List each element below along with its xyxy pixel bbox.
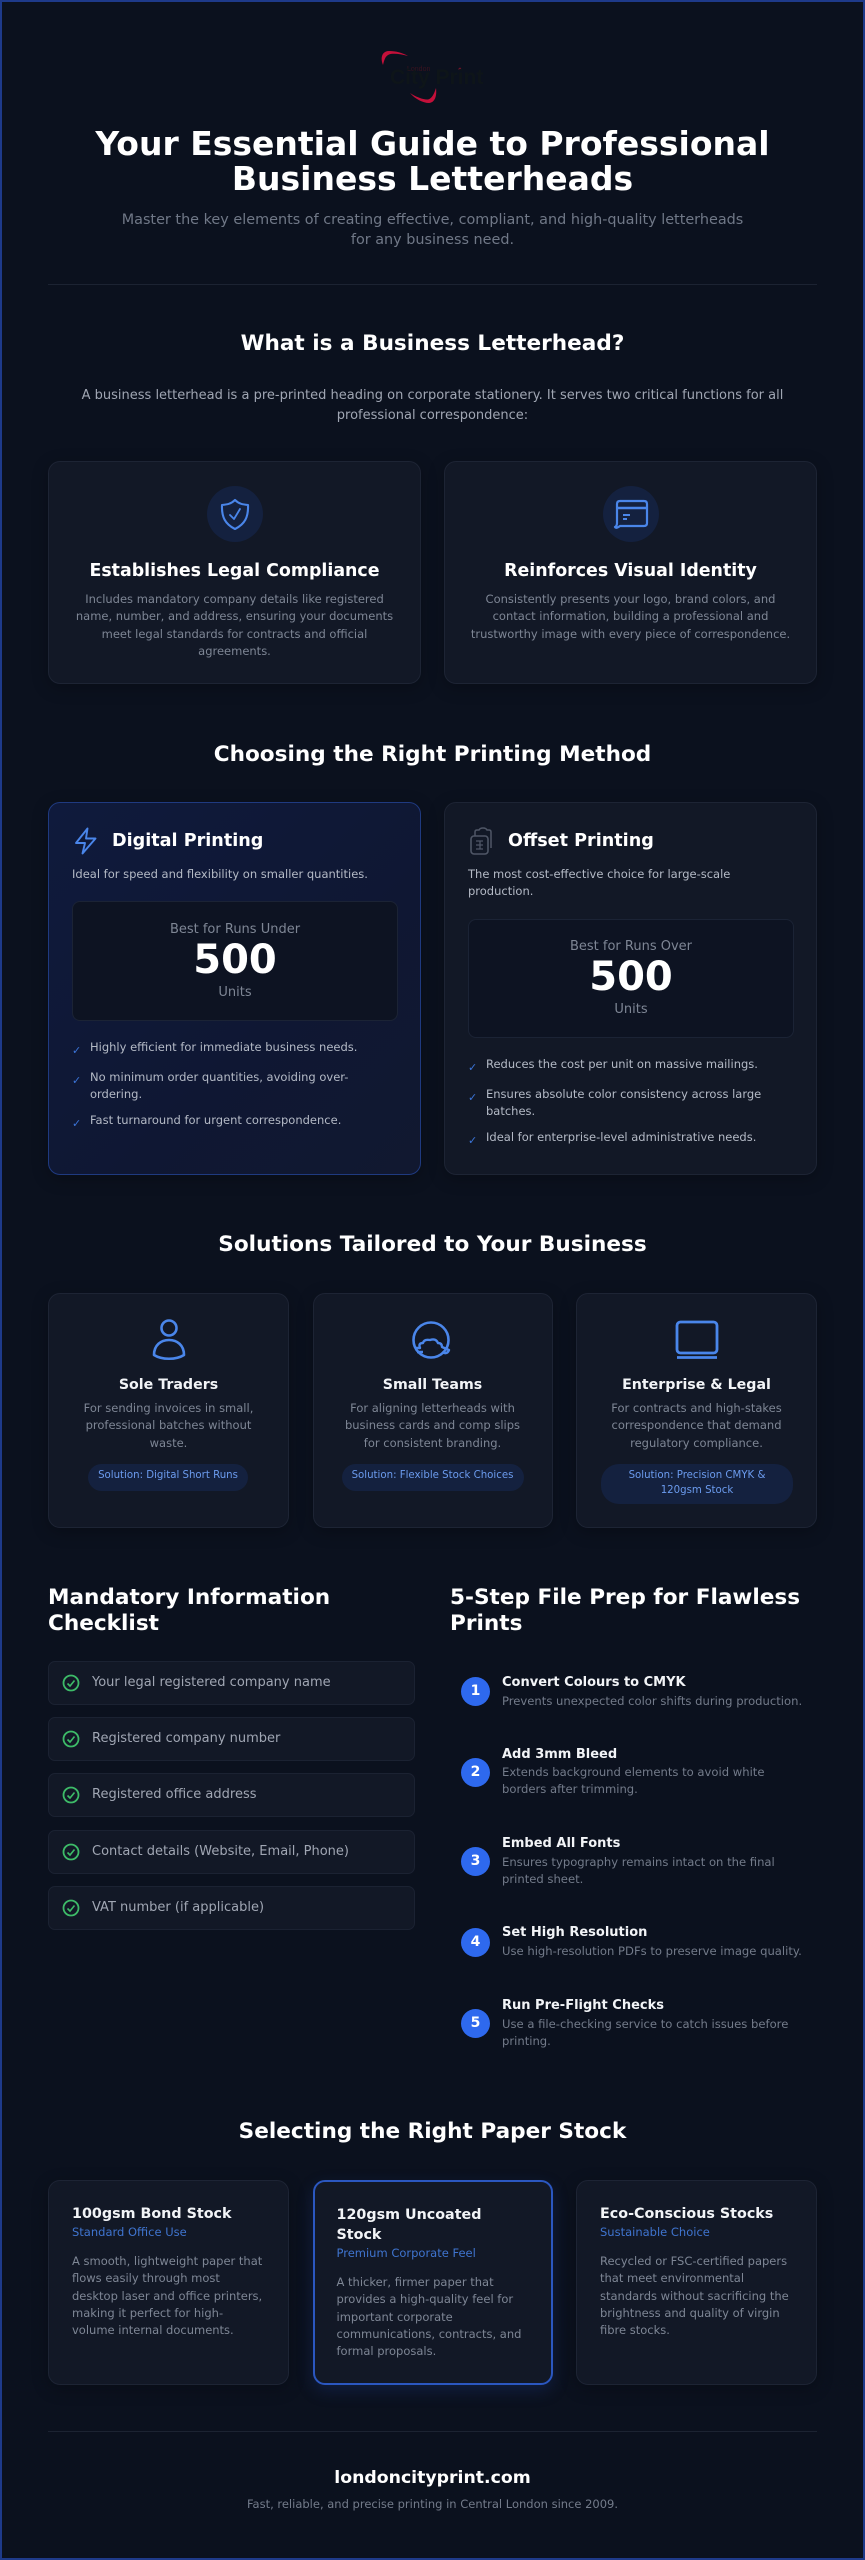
benefits list: Reduces the cost per unit on massive mailings. <box>486 1057 758 1071</box>
step 2: Add 3mm Bleed <box>502 1746 617 1762</box>
panel: legal compliance <box>48 461 421 684</box>
solution pill <box>342 1464 524 1491</box>
stock text <box>336 2275 521 2358</box>
stock subtitle: Premium Corporate Feel <box>336 2246 476 2260</box>
icon: shield <box>207 486 263 542</box>
benefits list: Highly efficient for immediate business needs. <box>90 1040 357 1054</box>
card text: meet legal standards for contracts and official <box>102 626 367 640</box>
stock title <box>336 2207 481 2243</box>
step 4: Set High Resolution <box>502 1925 647 1940</box>
card title: Enterprise & Legal <box>622 1377 771 1393</box>
step 5 <box>461 1998 788 2048</box>
title: Business Letterheads <box>232 159 633 198</box>
benefits list: Fast turnaround for urgent correspondence. <box>90 1113 341 1127</box>
item 1 <box>48 1661 415 1705</box>
step 4: Use high-resolution PDFs to preserve image quality. <box>502 1944 802 1958</box>
icon: person <box>152 1319 186 1360</box>
icon: lightning bolt <box>75 828 96 854</box>
benefits list: Ensures absolute color consistency across large <box>486 1087 761 1101</box>
stock text <box>600 2254 789 2337</box>
step 2: 2 <box>471 1764 480 1780</box>
step 4: 4 <box>471 1934 480 1950</box>
card text: business cards and comp slips <box>345 1418 520 1432</box>
intro text: A business letterhead is a pre-printed heading on corporate stationery. It serves two critical functions for all <box>82 388 783 403</box>
card text <box>84 1401 253 1450</box>
stock text: A smooth, lightweight paper that <box>72 2254 262 2268</box>
card title: Reinforces Visual Identity <box>504 561 757 581</box>
stock text: volume internal documents. <box>72 2323 234 2337</box>
card text: correspondence that demand <box>612 1418 782 1432</box>
stock text: Recycled or FSC-certified papers <box>600 2254 787 2268</box>
panel: enterprise and legal <box>576 1293 817 1528</box>
intro text <box>82 388 783 423</box>
stat box: under 500: Units <box>218 985 252 1000</box>
step 5: 5 <box>471 2014 480 2030</box>
card title: Small Teams <box>383 1377 482 1393</box>
step 5: Use a file-checking service to catch issues before <box>502 2016 788 2030</box>
title: Your Essential Guide to Professional <box>95 124 770 163</box>
heading: solutions: Solutions Tailored to Your Business <box>218 1232 647 1257</box>
stock text: brightness and quality of virgin <box>600 2306 780 2320</box>
card text: for consistent branding. <box>364 1436 501 1450</box>
item 2: Registered company number <box>92 1731 280 1746</box>
intro text: professional correspondence: <box>337 408 528 423</box>
step 3: printed sheet. <box>502 1872 583 1886</box>
benefits list: ✓ <box>468 1091 477 1104</box>
card text <box>468 867 730 898</box>
stock text: important corporate <box>336 2310 453 2324</box>
step 1 <box>461 1674 802 1708</box>
step 3 <box>461 1836 775 1886</box>
heading: file prep: Prints <box>450 1611 522 1636</box>
icon: offset press <box>470 827 492 855</box>
step 4 <box>461 1925 802 1958</box>
step 1: Convert Colours to CMYK <box>502 1674 686 1690</box>
benefits list: ✓ <box>468 1061 477 1074</box>
card text: For sending invoices in small, <box>84 1401 253 1415</box>
card text: Ideal for speed and flexibility on smaller quantities. <box>72 867 368 881</box>
solution pill <box>88 1464 248 1491</box>
step 2: borders after trimming. <box>502 1782 638 1796</box>
benefits list: batches. <box>486 1104 535 1118</box>
heading: checklist: Mandatory Information <box>48 1585 330 1610</box>
stock text: provides a high-quality feel for <box>336 2292 513 2306</box>
step 2: Extends background elements to avoid white <box>502 1765 764 1779</box>
stock title: 120gsm Uncoated <box>336 2207 481 2223</box>
step 3: Ensures typography remains intact on the final <box>502 1854 775 1868</box>
benefits list: ✓ <box>72 1044 81 1057</box>
subtitle <box>122 212 743 248</box>
card text: professional batches without <box>86 1418 251 1432</box>
icon: letterhead card <box>603 486 659 542</box>
stat box: under 500: 500 <box>193 937 277 983</box>
card title: Establishes Legal Compliance <box>89 561 380 581</box>
item 4 <box>48 1830 415 1874</box>
subtitle: Master the key elements of creating effective, compliant, and high-quality letterheads <box>122 212 743 228</box>
step 2 <box>461 1746 764 1796</box>
heading: file prep: 5-Step File Prep for Flawless <box>450 1585 800 1610</box>
benefits list: ✓ <box>72 1117 81 1130</box>
stock text <box>72 2254 262 2337</box>
panel: sole traders <box>48 1293 289 1528</box>
heading: file prep <box>450 1585 800 1636</box>
panel: 120gsm uncoated <box>312 2180 552 2385</box>
step 1: 1 <box>471 1682 480 1698</box>
steps <box>461 1674 802 2048</box>
step 1: Prevents unexpected color shifts during production. <box>502 1694 802 1708</box>
card text: production. <box>468 884 533 898</box>
panel: digital printing <box>48 802 421 1175</box>
panel: small teams <box>312 1293 552 1528</box>
benefits list: Ideal for enterprise-level administrative needs. <box>486 1130 756 1144</box>
stock text: formal proposals. <box>336 2344 436 2358</box>
stock subtitle: Standard Office Use <box>72 2225 187 2239</box>
stock subtitle: Sustainable Choice <box>600 2225 710 2239</box>
item 4: Contact details (Website, Email, Phone) <box>92 1844 349 1858</box>
stock title: Eco-Conscious Stocks <box>600 2206 773 2222</box>
panel: eco stocks <box>576 2180 817 2385</box>
stat box: over 500: Units <box>614 1002 648 1017</box>
heading: checklist: Checklist <box>48 1611 159 1636</box>
logo: London <box>407 66 430 73</box>
card text: agreements. <box>198 644 271 658</box>
card text: contact information, building a professional and <box>493 609 768 623</box>
stat box: over 500: Best for Runs Over <box>570 939 692 954</box>
item 3: Registered office address <box>92 1787 256 1802</box>
footer site name: londoncityprint.com <box>334 2468 531 2488</box>
card text <box>471 592 790 640</box>
solution pill: 120gsm Stock <box>661 1484 733 1496</box>
stat box: under 500 <box>72 901 398 1021</box>
card text <box>345 1401 520 1450</box>
card text: For aligning letterheads with <box>350 1401 515 1415</box>
title <box>95 124 770 198</box>
icon: team <box>412 1321 450 1359</box>
heading: what is a letterhead: What is a Business Letterhead? <box>241 331 624 356</box>
stat box: under 500: Best for Runs Under <box>170 922 300 937</box>
stat box: over 500 <box>468 919 794 1038</box>
card text: trustworthy image with every piece of correspondence. <box>471 626 790 640</box>
logo: City Print <box>390 66 483 89</box>
benefits list: No minimum order quantities, avoiding over- <box>90 1070 348 1084</box>
checklist <box>48 1661 415 1930</box>
benefits list: ✓ <box>72 1074 81 1087</box>
stock title: 100gsm Bond Stock <box>72 2206 232 2222</box>
panel: offset printing <box>444 802 817 1175</box>
card text: name, number, and address, ensuring your documents <box>76 609 393 623</box>
item 5: VAT number (if applicable) <box>92 1900 264 1915</box>
stat box: over 500: 500 <box>589 954 673 1000</box>
panel: visual identity <box>444 461 817 684</box>
step 5: Run Pre-Flight Checks <box>502 1998 664 2012</box>
benefits list <box>468 1057 761 1147</box>
step 5: printing. <box>502 2034 551 2048</box>
solution pill: Solution: Digital Short Runs <box>98 1470 238 1481</box>
card title: Offset Printing <box>508 831 654 851</box>
card title: Sole Traders <box>119 1377 218 1393</box>
solution pill: Solution: Flexible Stock Choices <box>352 1470 513 1481</box>
card text <box>611 1401 782 1450</box>
card text: regulatory compliance. <box>630 1436 763 1450</box>
footer tagline: Fast, reliable, and precise printing in Central London since 2009. <box>247 2497 618 2511</box>
card text: waste. <box>150 1436 187 1450</box>
step 3: 3 <box>471 1853 480 1869</box>
stock title: Stock <box>336 2227 381 2243</box>
stock text: communications, contracts, and <box>336 2327 521 2341</box>
card text: For contracts and high-stakes <box>611 1401 782 1415</box>
card text <box>76 592 393 658</box>
heading: paper stock: Selecting the Right Paper Stock <box>239 2119 626 2144</box>
step 3: Embed All Fonts <box>502 1836 620 1851</box>
item 3 <box>48 1773 415 1817</box>
stock text: standards without sacrificing the <box>600 2288 789 2302</box>
logo <box>382 51 483 103</box>
stock text: desktop laser and office printers, <box>72 2288 262 2302</box>
stock text: that meet environmental <box>600 2271 744 2285</box>
item 5 <box>48 1886 415 1930</box>
item 2 <box>48 1717 415 1761</box>
heading: printing method: Choosing the Right Printing Method <box>214 742 651 767</box>
stock text: fibre stocks. <box>600 2323 670 2337</box>
benefits list: ✓ <box>468 1134 477 1147</box>
card text: Consistently presents your logo, brand colors, and <box>486 592 775 606</box>
solution pill: Solution: Precision CMYK & <box>629 1470 765 1481</box>
stock text: making it perfect for high- <box>72 2306 223 2320</box>
solution pill <box>601 1464 793 1504</box>
card text: The most cost-effective choice for large-scale <box>468 867 730 881</box>
heading: checklist <box>48 1585 330 1636</box>
benefits list: ordering. <box>90 1087 142 1101</box>
panel: 100gsm bond <box>48 2180 289 2385</box>
benefits list <box>72 1040 357 1130</box>
subtitle: for any business need. <box>351 232 514 248</box>
item 1: Your legal registered company name <box>92 1675 331 1690</box>
card title: Digital Printing <box>112 831 263 851</box>
stock text: flows easily through most <box>72 2271 220 2285</box>
card text: Includes mandatory company details like registered <box>85 592 384 606</box>
icon: laptop <box>676 1320 718 1359</box>
stock text: A thicker, firmer paper that <box>336 2275 494 2289</box>
